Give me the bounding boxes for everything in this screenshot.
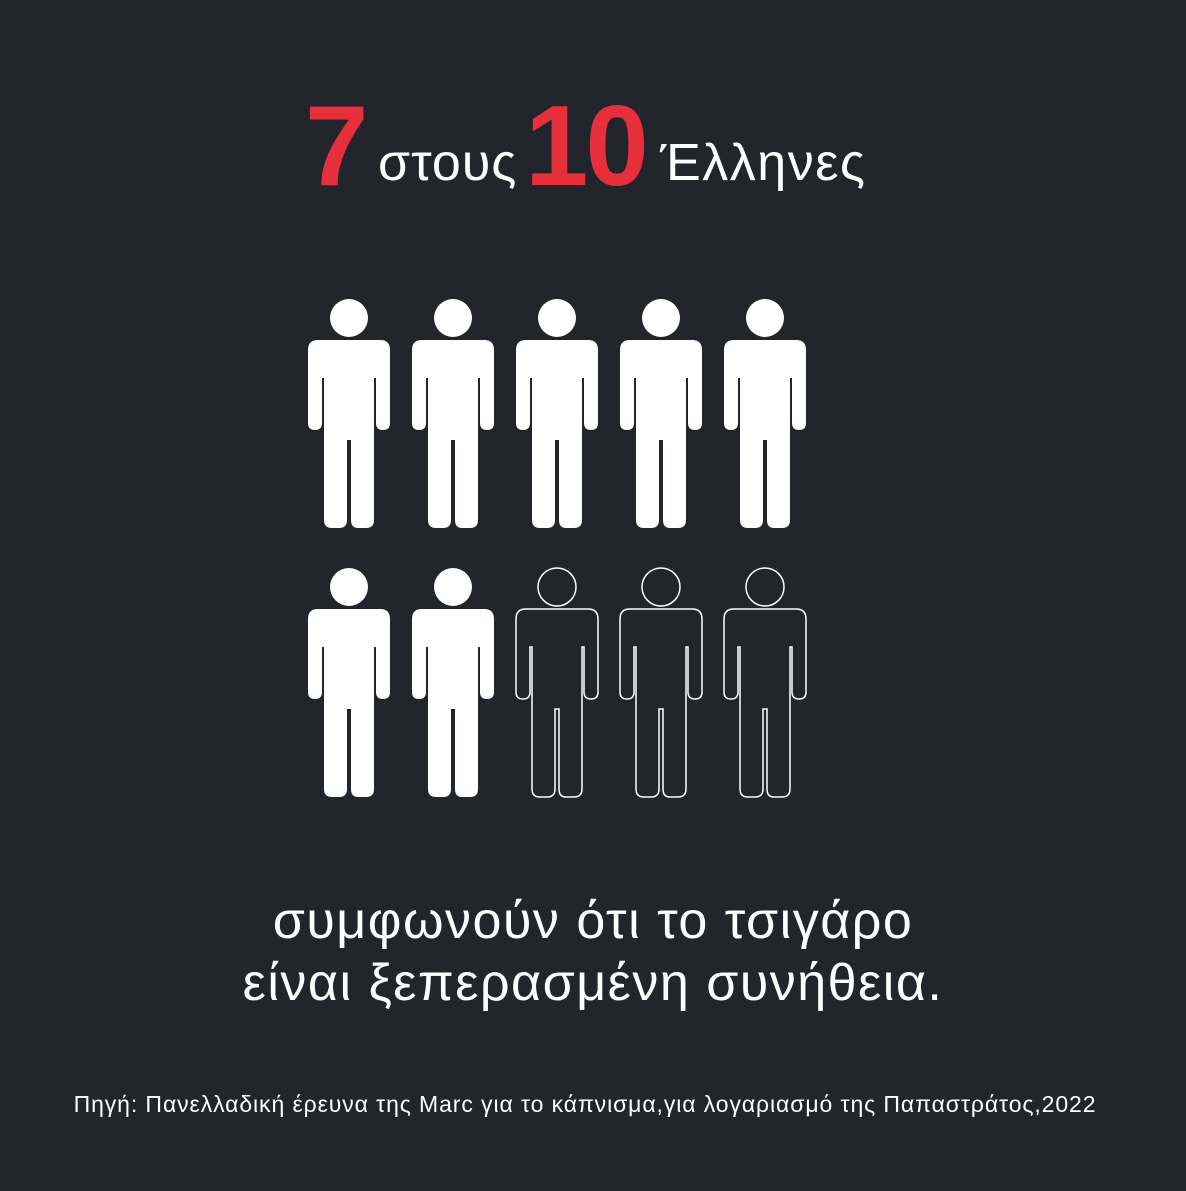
title: Έλληνες: [660, 134, 866, 192]
statement text: [243, 892, 943, 1012]
statement text: συμφωνούν ότι το τσιγάρο: [273, 892, 913, 950]
source footnote: Πηγή: Πανελλαδική έρευνα της Marc για το κάπνισμα,για λογαριασμό της Παπαστράτος,2022: [74, 1091, 1096, 1117]
title: 7: [305, 83, 368, 210]
statement text: είναι ξεπερασμένη συνήθεια.: [243, 954, 943, 1012]
pictogram: 7 of 10 people: [308, 299, 807, 798]
title: 10: [525, 83, 646, 210]
title: [305, 83, 866, 210]
title: στους: [378, 134, 517, 192]
